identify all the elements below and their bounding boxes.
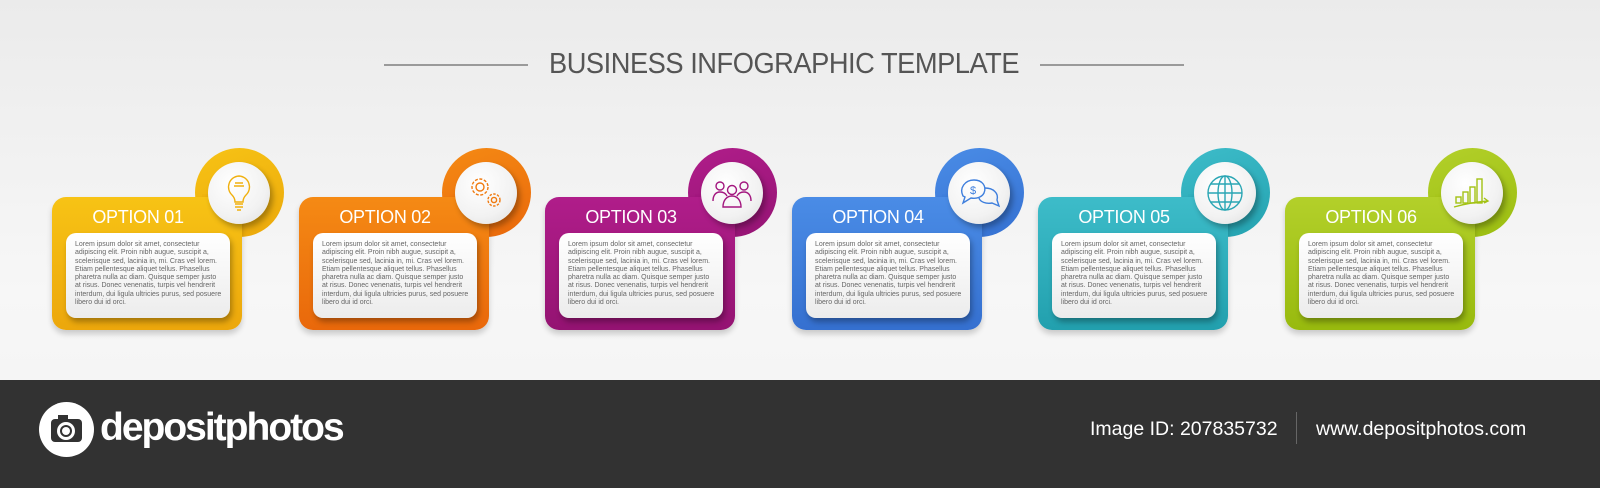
icon: chat dollar: $ [970,185,976,197]
panel: option 01 [50,148,284,336]
heading: OPTION 05 [1078,207,1170,227]
icon: globe [1194,162,1256,224]
heading: OPTION 06 [1325,207,1417,227]
text block: Lorem ipsum dolor sit amet, consectetur adipiscing elit. Proin nibh augue, suscipit a, scelerisque sed, lacinia in, mi. Cras vel lorem. Etiam pellentesque aliquet tellus. Phasellus pharetra nulla ac diam. Quisque semper justo at risus. Donec venenatis, turpis vel hendrerit interdum, dui ligula ultricies purus, sed posuere libero dui id orci. [815,241,961,306]
text block [1299,233,1463,318]
image id: Image ID: 207835732 [1090,418,1278,440]
panel: option 05 [1036,148,1270,336]
text block: Lorem ipsum dolor sit amet, consectetur adipiscing elit. Proin nibh augue, suscipit a, scelerisque sed, lacinia in, mi. Cras vel lorem. Etiam pellentesque aliquet tellus. Phasellus pharetra nulla ac diam. Quisque semper justo at risus. Donec venenatis, turpis vel hendrerit interdum, dui ligula ultricies purus, sed posuere libero dui id orci. [322,241,468,306]
heading: OPTION 04 [832,207,924,227]
text block: Lorem ipsum dolor sit amet, consectetur adipiscing elit. Proin nibh augue, suscipit a, scelerisque sed, lacinia in, mi. Cras vel lorem. Etiam pellentesque aliquet tellus. Phasellus pharetra nulla ac diam. Quisque semper justo at risus. Donec venenatis, turpis vel hendrerit interdum, dui ligula ultricies purus, sed posuere libero dui id orci. [75,241,221,306]
heading: OPTION 02 [339,207,431,227]
text block: Lorem ipsum dolor sit amet, consectetur adipiscing elit. Proin nibh augue, suscipit a, scelerisque sed, lacinia in, mi. Cras vel lorem. Etiam pellentesque aliquet tellus. Phasellus pharetra nulla ac diam. Quisque semper justo at risus. Donec venenatis, turpis vel hendrerit interdum, dui ligula ultricies purus, sed posuere libero dui id orci. [1061,241,1207,306]
text block: Lorem ipsum dolor sit amet, consectetur adipiscing elit. Proin nibh augue, suscipit a, scelerisque sed, lacinia in, mi. Cras vel lorem. Etiam pellentesque aliquet tellus. Phasellus pharetra nulla ac diam. Quisque semper justo at risus. Donec venenatis, turpis vel hendrerit interdum, dui ligula ultricies purus, sed posuere libero dui id orci. [568,241,714,306]
icon: gears [455,162,517,224]
website url: www.depositphotos.com [1316,418,1526,440]
text block: Lorem ipsum dolor sit amet, consectetur adipiscing elit. Proin nibh augue, suscipit a, scelerisque sed, lacinia in, mi. Cras vel lorem. Etiam pellentesque aliquet tellus. Phasellus pharetra nulla ac diam. Quisque semper justo at risus. Donec venenatis, turpis vel hendrerit interdum, dui ligula ultricies purus, sed posuere libero dui id orci. [1308,241,1454,306]
icon: camera [39,402,94,457]
logo: depositphotos [39,402,344,457]
heading: OPTION 01 [92,207,184,227]
panel: option 03 [542,148,777,336]
panel: option 04 [790,148,1024,336]
text block [66,233,230,318]
panel: option 06 [1282,148,1517,336]
text block [1052,233,1216,318]
icon: chat dollar [948,162,1010,224]
logo: depositphotos: depositphotos [100,406,343,449]
title: BUSINESS INFOGRAPHIC TEMPLATE [549,48,1019,80]
heading: OPTION 03 [585,207,677,227]
text block [559,233,723,318]
text block [806,233,970,318]
text block [313,233,477,318]
icon: bar chart [1441,162,1503,224]
icon: people [701,162,763,224]
panel: option 02 [296,148,531,336]
footer bar [0,380,1600,488]
icon: light bulb [208,162,270,224]
